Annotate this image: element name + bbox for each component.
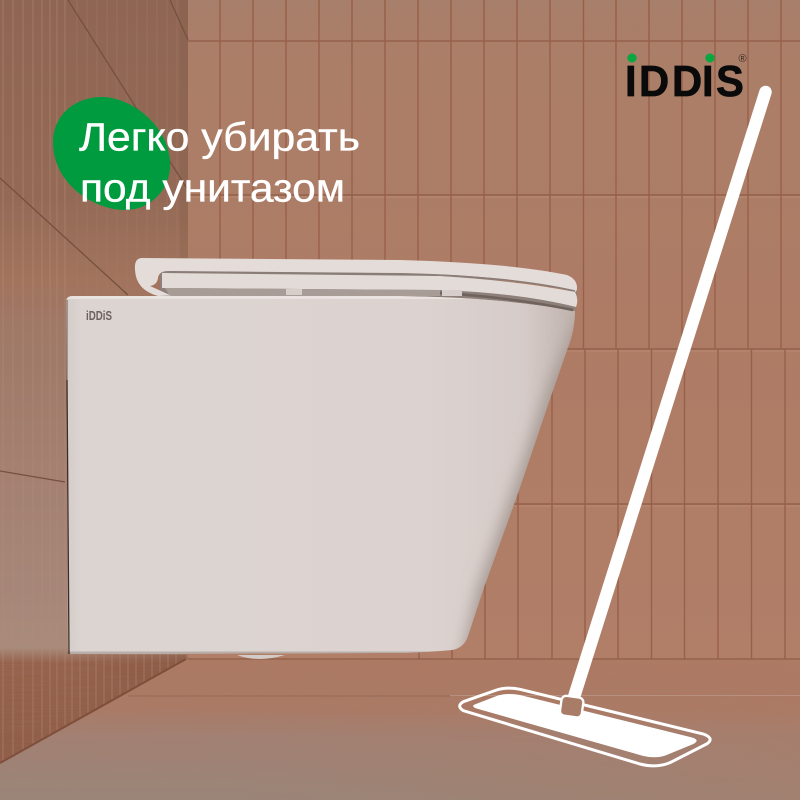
mop head: [460, 688, 710, 766]
toilet lid: [135, 258, 577, 296]
IDDIS logo: [625, 53, 747, 106]
headline line 2: под унитазом: [80, 166, 345, 210]
toilet bowl: [66, 296, 600, 660]
mop handle: [574, 92, 766, 697]
mop joint: [559, 695, 584, 718]
mop icon: [460, 92, 766, 766]
toilet seat: [160, 270, 577, 311]
toilet logo: iDDiS: [86, 308, 112, 323]
toilet: [66, 258, 600, 660]
drain bump under bowl: [237, 655, 285, 659]
green blob: [53, 97, 170, 210]
back wall with tiles: [188, 0, 800, 662]
logo wordmark: IDDIS: [625, 57, 744, 106]
lid gap shadow: [168, 272, 575, 291]
logo green dots: [627, 54, 715, 62]
headline: [79, 116, 360, 210]
registered mark: ®: [738, 53, 747, 65]
left wall with narrow tiles: [0, 0, 188, 762]
headline line 1: Легко убирать: [79, 116, 360, 160]
floor: [0, 659, 800, 800]
